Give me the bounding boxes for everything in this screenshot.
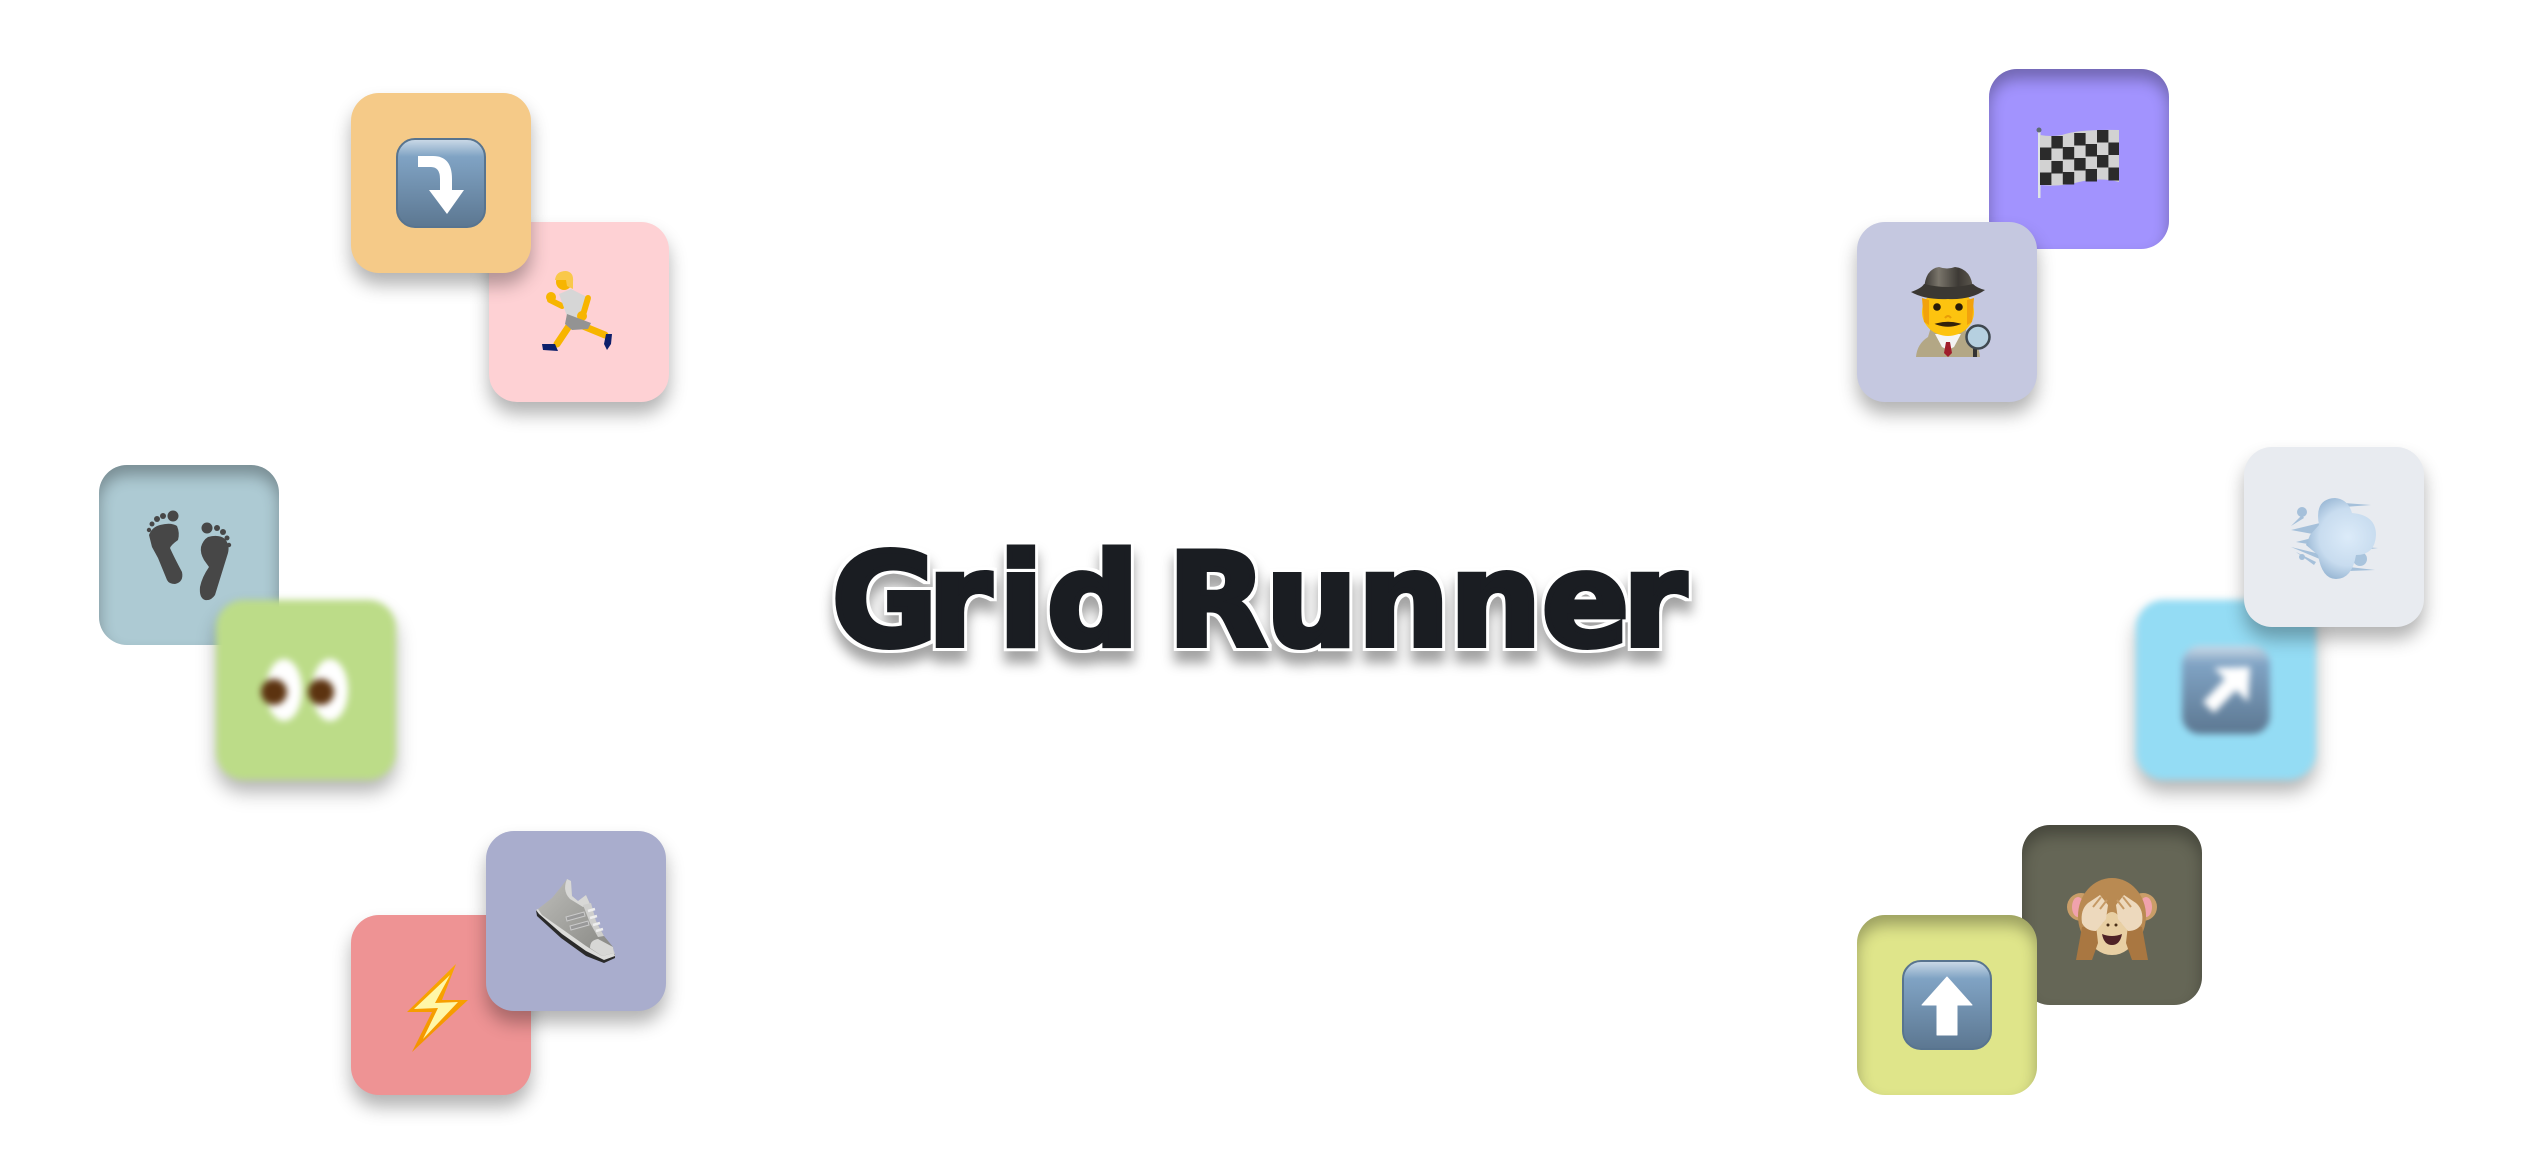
tile: dashing away — [2244, 447, 2424, 627]
tile: running person — [489, 222, 669, 402]
icon: runner — [542, 271, 612, 351]
title: Grid Runner — [832, 527, 1686, 676]
tile: up arrow — [1857, 915, 2037, 1095]
icon: north-east arrow key — [2178, 643, 2274, 738]
tile: curved arrow down — [351, 93, 531, 273]
icon: monkey covering eyes — [2067, 878, 2157, 960]
tile: north-east arrow (blurred) — [2136, 600, 2316, 780]
icon: lightning bolt — [407, 964, 468, 1052]
icon: eyes — [256, 654, 352, 726]
tile: chequered flag — [1989, 69, 2169, 249]
tile: footprints — [99, 465, 279, 645]
icon: footprints — [146, 510, 232, 600]
icon: chequered flag — [2036, 128, 2119, 198]
tile: detective — [1857, 222, 2037, 402]
icon: arrow curving down key — [396, 138, 486, 228]
tile: sneaker — [486, 831, 666, 1011]
icon: up arrow key — [1902, 960, 1992, 1050]
icon: running shoe — [536, 879, 615, 963]
icon: detective — [1911, 267, 1991, 357]
tile: see-no-evil monkey — [2022, 825, 2202, 1005]
tile: eyes (blurred) — [216, 600, 396, 780]
tile: lightning — [351, 915, 531, 1095]
icon: puff of wind — [2291, 498, 2378, 579]
